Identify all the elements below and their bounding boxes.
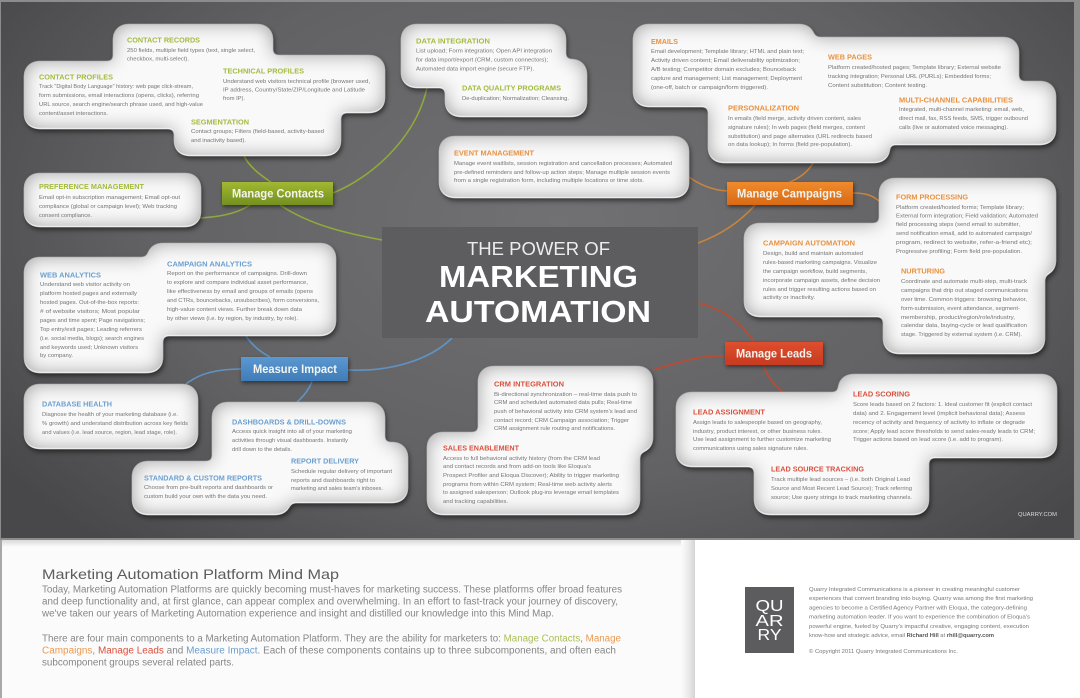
text: contact records: CONTACT RECORDS xyxy=(127,38,200,44)
tag: manage contacts: Manage Contacts xyxy=(232,188,324,200)
text: nurturing: Coordinate and automate multi-step, multi-track xyxy=(901,279,1027,285)
text: contact records: 250 fields, multiple field types (text, single select, xyxy=(127,48,256,54)
text: web analytics: hosted pages. Out-of-the-box reports: xyxy=(40,300,139,306)
panel: lead scoring and assignment xyxy=(676,374,1057,515)
intro paragraph xyxy=(41,584,622,620)
text: data integration: Automated data import engine (secure FTP). xyxy=(416,66,534,72)
text: multi-channel capabilities xyxy=(899,98,1028,131)
text: campaign automation: rules and trigger resulting actions based on xyxy=(763,287,876,293)
text: standard and custom reports: STANDARD & CUSTOM REPORTS xyxy=(144,476,262,482)
text: web analytics xyxy=(40,272,146,359)
text: dashboards and drill-downs xyxy=(232,420,352,453)
text: contact profiles xyxy=(39,74,203,117)
logo: quarry: QU xyxy=(756,598,784,615)
text: contact profiles: CONTACT PROFILES xyxy=(39,74,113,82)
text: preference management: consent compliance. xyxy=(39,213,92,219)
text: campaign automation: activity or inactivity. xyxy=(763,295,815,301)
text: form processing: field processing steps (send email to submitter, xyxy=(896,222,1021,228)
text: crm integration: CRM assignment rule routing and notifications. xyxy=(494,426,615,432)
text: form processing: FORM PROCESSING xyxy=(896,194,969,202)
connector lines: manage campaigns xyxy=(689,163,879,243)
text: segmentation: SEGMENTATION xyxy=(191,120,249,126)
text: campaign automation: CAMPAIGN AUTOMATION xyxy=(763,240,855,248)
site credit: QUARRY.COM xyxy=(1018,512,1057,518)
text: form processing: External form integration; Field validation; Automated xyxy=(896,214,1038,220)
logo: quarry: AR xyxy=(756,613,784,630)
text: personalization: PERSONALIZATION xyxy=(728,106,799,112)
text: sales enablement: SALES ENABLEMENT xyxy=(443,446,520,452)
text: event management xyxy=(454,150,672,184)
panel: crm integration and sales enablement xyxy=(427,366,653,515)
text: nurturing xyxy=(901,268,1028,338)
panel: contact records and profiles xyxy=(24,24,385,156)
text: campaign analytics: CAMPAIGN ANALYTICS xyxy=(167,262,252,268)
bubble shape xyxy=(744,178,1056,354)
text: standard and custom reports: Choose from pre-built reports and dashboards or xyxy=(144,485,273,491)
text: form processing: Progressive profiling; Form field pre-population. xyxy=(896,249,1022,255)
text: form processing: program, redirect to website, refer-a-friend etc); xyxy=(896,240,1033,246)
bottom panel: mind map intro xyxy=(0,540,695,698)
text: lead scoring: data) and 2. Engagement level (implicit behavioral data); Assess xyxy=(853,411,1025,417)
text: nurturing: over time. Common triggers: browsing behavior, xyxy=(901,297,1028,303)
text: lead scoring: recency of activity and frequency of activity to inflate or degrade xyxy=(853,420,1025,426)
bottom panel: quarry xyxy=(695,540,1080,698)
text: database health: DATABASE HEALTH xyxy=(42,402,112,408)
text: lead source tracking: Track multiple lead sources – (i.e. both Original Lead xyxy=(771,477,910,483)
text: sales enablement: and tracking capabilities. xyxy=(443,499,508,505)
text: event management: pre-defined reminders and follow-up action steps; Manage multiple session events xyxy=(454,170,670,176)
text: personalization: In emails (field merge, activity driven content, sales xyxy=(728,116,861,122)
text: data integration: DATA INTEGRATION xyxy=(416,38,490,46)
text: multi-channel capabilities: direct mail, fax, RSS feeds, SMS, trigger outbound xyxy=(899,116,1028,122)
text: web analytics: Top entry/exit pages; Leading referrers xyxy=(40,327,142,333)
connector lines: manage contacts xyxy=(200,88,427,240)
text: web analytics: pages and time spent; Page navigations; xyxy=(40,318,146,324)
bubble shape xyxy=(24,243,336,373)
text: web analytics: by company. xyxy=(40,353,73,359)
text: nurturing: form-submission, event attendance, segment- xyxy=(901,306,1020,312)
connector lines: manage leads xyxy=(653,303,783,392)
text: dashboards and drill-downs: drill down to the details. xyxy=(232,447,292,453)
panel: form processing and campaign automation xyxy=(744,178,1056,354)
bubble shape xyxy=(24,173,201,227)
text: preference management: compliance (global or campaign level); Web tracking xyxy=(39,204,177,210)
bubble shape xyxy=(24,384,198,449)
central title: MARKETING xyxy=(439,259,638,294)
text: crm integration: Bi-directional synchronization – real-time data push to xyxy=(494,392,637,398)
bubble shape xyxy=(132,402,408,515)
text: campaign analytics: by other views (i.e. by region, by industry, by role). xyxy=(167,316,298,322)
text: technical profiles: TECHNICAL PROFILES xyxy=(223,68,304,76)
text: crm integration: CRM and scheduled automated data pulls; Real-time xyxy=(494,400,632,406)
text: personalization: on data lookup); In forms (field pre-population). xyxy=(728,142,852,148)
text: nurturing: campaigns that drip out staged communications xyxy=(901,288,1028,294)
tag: manage leads: Manage Leads xyxy=(736,348,812,360)
text: lead scoring: Trigger actions based on lead score (i.e. add to program). xyxy=(853,437,1003,443)
bubble shape xyxy=(24,24,385,156)
panel: data integration xyxy=(401,24,587,117)
connector lines: measure impact xyxy=(186,336,452,402)
text: sales enablement: Prospect Profiler and Eloqua Discover); Ability to trigger marketing xyxy=(443,473,619,479)
text: multi-channel capabilities: MULTI-CHANNEL CAPABILITIES xyxy=(899,98,1013,104)
text: emails: A/B testing; Competitor domain excludes; Bounceback xyxy=(651,67,796,73)
tag: manage leads xyxy=(725,342,823,365)
tag: manage contacts xyxy=(222,182,333,205)
text: technical profiles: from IP). xyxy=(223,96,245,102)
text: lead scoring xyxy=(853,392,1036,443)
text: sales enablement: Access to full behavioral activity history (from the CRM lead xyxy=(443,456,600,462)
panel: event management xyxy=(439,136,689,198)
text: data integration: List upload; Form integration; Open API integration xyxy=(416,48,552,54)
panel: dashboards and reports xyxy=(132,402,408,515)
text: multi-channel capabilities: calls (live or automated voice messaging). xyxy=(899,125,1008,131)
text: segmentation: Contact groups; Filters (field-based, activity-based xyxy=(191,129,324,135)
text: preference management: Email opt-in subscription management; Email opt-out xyxy=(39,195,181,201)
text: data quality programs: De-duplication; Normalization; Cleansing. xyxy=(462,96,569,102)
text: lead scoring: LEAD SCORING xyxy=(853,392,911,398)
central title: AUTOMATION xyxy=(425,294,651,329)
text: segmentation: and inactivity based). xyxy=(191,138,246,144)
text: lead source tracking: Source and Most Recent Lead Source); Track referring xyxy=(771,486,912,492)
text: technical profiles xyxy=(223,68,371,102)
components paragraph: Campaigns, Manage Leads and Measure Impact. Each of these components contains up to three subcomponents, and often each xyxy=(42,646,616,656)
text: sales enablement: and contact records and from add-on tools like Eloqua's xyxy=(443,464,591,470)
text: contact profiles: content/asset interactions. xyxy=(39,111,108,117)
text: web analytics: (i.e. social media, blogs); search engines xyxy=(40,336,144,342)
text: web pages: WEB PAGES xyxy=(828,54,872,62)
text: lead assignment: communications using sales signature rules. xyxy=(693,446,808,452)
text: sales enablement xyxy=(443,446,619,505)
panel: preference management xyxy=(24,173,201,227)
text: nurturing: membership, product/region/role/industry, xyxy=(901,315,1016,321)
text: form processing xyxy=(896,194,1038,255)
text: dashboards and drill-downs: Access quick insight into all of your marketing xyxy=(232,429,352,435)
intro paragraph: and deep functionality and, at first glance, can appear complex and overwhelming. In an effort to fast-track your journey of discovery, xyxy=(42,596,618,608)
text: multi-channel capabilities: Integrated, multi-channel marketing: email, web, xyxy=(899,107,1025,113)
text: report delivery xyxy=(291,458,393,492)
text: lead assignment: Use lead assignment to further customize marketing xyxy=(693,437,831,443)
text: sales enablement: to assigned salesperson; Outlook plug-ins leverage email templates xyxy=(443,490,619,496)
text: database health xyxy=(42,402,188,436)
text: database health: Diagnose the health of your marketing database (i.e. xyxy=(42,412,178,418)
text: contact records xyxy=(127,38,256,62)
text: lead assignment: LEAD ASSIGNMENT xyxy=(693,410,766,416)
text: lead assignment xyxy=(693,410,831,452)
bubble shape xyxy=(633,24,1056,163)
text: nurturing: stage. Triggered by external system (i.e. CRM). xyxy=(901,332,1022,338)
text: contact profiles: Track "Digital Body Language" history: web page click-stream, xyxy=(39,84,194,90)
text: about quarry: Quarry Integrated Communications is a pioneer in creating meaningful customer xyxy=(809,587,1020,593)
text: about quarry: agencies to become a Certified Agency Partner with Eloqua, the category-defining xyxy=(809,606,1027,612)
text: campaign automation: Design, build and maintain automated xyxy=(763,251,863,257)
text: campaign automation: rules-based marketing campaigns. Visualize xyxy=(763,260,877,266)
text: campaign analytics: like effectiveness by email and groups of emails (opens xyxy=(167,289,313,295)
text: dashboards and drill-downs: DASHBOARDS & DRILL-DOWNS xyxy=(232,420,346,426)
text: campaign automation xyxy=(763,240,880,301)
text: web pages: Content substitution; Content testing. xyxy=(828,83,927,89)
text: report delivery: reports and dashboards right to xyxy=(291,478,375,484)
bubble shape xyxy=(401,24,587,117)
text: emails xyxy=(651,39,805,91)
text: data integration xyxy=(416,38,552,72)
panel: emails and web pages xyxy=(633,24,1056,163)
text: campaign automation: the campaign workflow, build segments, xyxy=(763,269,868,275)
text: campaign analytics: to explore and compare individual asset performance, xyxy=(167,280,309,286)
text: emails: Activity driven content; Email deliverability optimization; xyxy=(651,58,801,64)
text: web analytics: Understand web visitor activity on xyxy=(40,282,130,288)
text: web analytics: platform hosted pages and externally xyxy=(40,291,137,297)
text: copyright: © Copyright 2011 Quarry Integrated Communications Inc. xyxy=(809,648,958,655)
heading: mind map: Marketing Automation Platform Mind Map xyxy=(42,566,339,582)
text: web analytics: and keywords used; Unknown visitors xyxy=(40,345,138,351)
text: crm integration: contact record; CRM Campaign association; Trigger xyxy=(494,418,629,424)
text: crm integration: push of behavioral activity into CRM system's lead and xyxy=(494,409,637,415)
text: crm integration: CRM INTEGRATION xyxy=(494,382,564,388)
components paragraph xyxy=(42,634,622,668)
text: about quarry: powerful engine, fueled by Quarry's impactful creative, engaging content, execution xyxy=(809,624,1029,630)
text: contact profiles: URL source, search engine/search phrase used, and high-value xyxy=(39,102,203,108)
intro paragraph: we've taken our years of Marketing Automation experience and insight and distilled our knowledge into this Mind Map. xyxy=(41,608,554,620)
text: web analytics: # of website visitors; Most popular xyxy=(40,309,140,315)
text: lead assignment: Assign leads to salespeople based on geography, xyxy=(693,420,823,426)
text: campaign automation: incorporate campaign assets, define decision xyxy=(763,278,880,284)
components paragraph: subcomponent groups several related parts. xyxy=(42,658,234,668)
text: personalization xyxy=(728,106,872,148)
text: segmentation xyxy=(191,120,324,144)
components paragraph: There are four main components to a Marketing Automation Platform. They are the ability for marketers to: Manage Contacts, Manage xyxy=(42,634,622,644)
text: contact records: checkbox, multi-select). xyxy=(127,56,189,62)
text: campaign analytics: high-value content views. Further break down data xyxy=(167,307,302,313)
text: personalization: signature rules); In web pages (field merges, content xyxy=(728,125,866,131)
text: standard and custom reports xyxy=(144,476,273,500)
text: data quality programs: DATA QUALITY PROGRAMS xyxy=(462,86,561,92)
text: data integration: for data import/export (CRM, custom connectors); xyxy=(416,58,549,64)
text: database health: and values (i.e. lead source, region, lead stage, role). xyxy=(42,430,177,436)
text: web analytics: WEB ANALYTICS xyxy=(40,272,101,280)
tag: manage campaigns: Manage Campaigns xyxy=(737,188,842,200)
central title: THE POWER OF xyxy=(467,239,610,259)
text: nurturing: calendar data, buying-cycle or lead qualification xyxy=(901,323,1027,329)
bubble shape xyxy=(439,136,689,198)
bubble shape xyxy=(427,366,653,515)
text: about quarry: experiences that convert branding into buying. Quarry was among the first marketing xyxy=(809,596,1033,602)
text: lead assignment: industry, product interest, or other business rules. xyxy=(693,429,822,435)
text: event management: EVENT MANAGEMENT xyxy=(454,150,535,158)
panel: web and campaign analytics xyxy=(24,243,336,373)
text: preference management: PREFERENCE MANAGEMENT xyxy=(39,184,145,191)
text: form processing: Platform created/hosted forms; Template library; xyxy=(896,205,1025,211)
text: about quarry xyxy=(809,587,1033,639)
intro paragraph: Today, Marketing Automation Platforms are quickly becoming must-haves for marketing success. These platforms offer broad features xyxy=(42,584,622,596)
bubble shape xyxy=(676,374,1057,515)
text: contact profiles: form submissions, email interactions (opens, clicks), referring xyxy=(39,93,199,99)
text: lead source tracking: source; Use query strings to track marketing channels. xyxy=(771,495,912,501)
tag: measure impact xyxy=(241,357,348,381)
text: lead source tracking xyxy=(771,466,912,501)
text: preference management xyxy=(39,184,181,219)
text: event management: from a single registration form, including multiple locations or time slots. xyxy=(454,178,644,184)
text: technical profiles: IP address, Country/State/ZIP/Longitude and Latitude xyxy=(223,88,365,94)
text: nurturing: NURTURING xyxy=(901,268,946,276)
text: data quality programs xyxy=(462,86,569,102)
text: about quarry: know-how and strategic advice, email Richard Hill at rhill@quarry.com xyxy=(809,633,994,639)
text: dashboards and drill-downs: activities through visual dashboards. Instantly xyxy=(232,438,348,444)
tag: measure impact: Measure Impact xyxy=(253,364,337,376)
panel: database health xyxy=(24,384,198,449)
text: lead scoring: Score leads based on 2 factors: 1. Ideal customer fit (explicit contact xyxy=(853,402,1033,408)
text: emails: capture and management; List management; Deployment xyxy=(651,76,803,82)
text: event management: Manage event waitlists, session registration and cancellation processes; Automated xyxy=(454,161,672,167)
logo: quarry xyxy=(745,587,794,653)
text: campaign analytics: and CTRs, bouncebacks, unsubscribes), form conversions, xyxy=(167,298,320,304)
mind map background xyxy=(0,0,1080,540)
text: emails: EMAILS xyxy=(651,39,678,46)
text: database health: % growth) and understand distribution across key fields xyxy=(42,421,188,427)
text: personalization: substitution) and page alternates (URL redirects based xyxy=(728,134,872,140)
tag: manage campaigns xyxy=(727,182,853,205)
text: web pages xyxy=(828,54,1001,89)
text: campaign analytics: Report on the performance of campaigns. Drill-down xyxy=(167,271,307,277)
logo: quarry: RY xyxy=(758,627,782,644)
text: emails: (one-off, batch or campaign/form triggered). xyxy=(651,85,768,91)
text: web pages: tracking integration; Personal URL (PURLs); Embedded forms; xyxy=(828,74,992,80)
text: report delivery: marketing and sales team's inboxes. xyxy=(291,486,383,492)
central title xyxy=(382,227,698,338)
text: emails: Email development; Template library; HTML and plain text; xyxy=(651,49,805,55)
text: about quarry: marketing automation leader. If you want to experience the combination of Eloqua's xyxy=(809,614,1030,620)
text: web pages: Platform created/hosted pages; Template library; External website xyxy=(828,65,1001,71)
text: report delivery: REPORT DELIVERY xyxy=(291,458,359,466)
text: campaign analytics xyxy=(167,262,320,322)
text: lead scoring: score; Apply lead score thresholds to send sales-ready leads to CRM; xyxy=(853,429,1036,435)
text: form processing: send notification email, add to automated campaign/ xyxy=(896,231,1033,237)
text: standard and custom reports: custom build your own with the data you need. xyxy=(144,494,267,500)
text: crm integration xyxy=(494,382,637,432)
text: sales enablement: programs from within CRM system; Real-time web activity alerts xyxy=(443,482,612,488)
text: report delivery: Schedule regular delivery of important xyxy=(291,469,393,475)
text: technical profiles: Understand web visitors technical profile (browser used, xyxy=(223,79,371,85)
text: lead source tracking: LEAD SOURCE TRACKING xyxy=(771,466,865,474)
